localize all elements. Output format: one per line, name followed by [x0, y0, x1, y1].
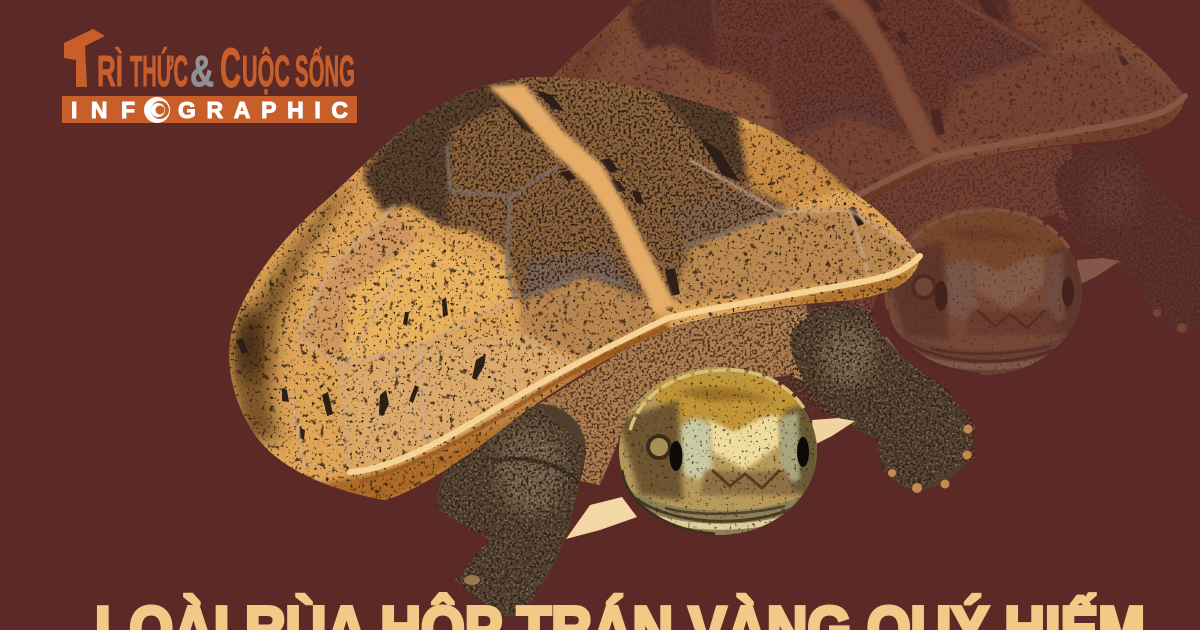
banner icon: concentric O: [144, 97, 170, 123]
right side dark: [785, 400, 820, 500]
dark speckle marks: [236, 208, 864, 440]
plastron right: [812, 418, 855, 445]
lower orange band: [300, 318, 668, 505]
logo wordmark: &: [190, 47, 214, 96]
lower jaw bands: [630, 490, 815, 540]
gold crown: [655, 373, 810, 436]
pale orange scute right: [740, 126, 844, 206]
lower face pattern: [700, 470, 795, 495]
black seam blotches: [500, 90, 740, 296]
logo wordmark: [97, 36, 355, 99]
banner text: [71, 97, 348, 123]
fine speckle texture: [225, 75, 925, 505]
infographic canvas: SỐNG: [295, 45, 355, 96]
logo wordmark: RÌ: [97, 46, 123, 96]
toes: [888, 424, 972, 493]
greyish seams: [447, 145, 785, 300]
body skin under shell: [490, 300, 860, 490]
scute seams: [290, 160, 920, 468]
left cheek: [618, 400, 683, 500]
central stripe: [488, 84, 676, 312]
infographic banner: [62, 96, 357, 123]
right eye zone: [780, 412, 800, 482]
logo: [62, 29, 357, 123]
head: [618, 367, 820, 540]
shell: [225, 50, 925, 505]
left eye zone: [680, 418, 712, 480]
eye ring: [648, 436, 670, 458]
head rim: [630, 370, 805, 430]
left edge shading: [225, 175, 360, 440]
ghost turtle watermark: [490, 0, 1200, 460]
shell rim highlight: [350, 256, 920, 472]
logo icon: roof T: [64, 29, 105, 87]
logo wordmark: THỨC: [130, 46, 188, 96]
logo wordmark: C: [220, 36, 241, 99]
dark carapace scutes: [340, 50, 820, 330]
logo wordmark: UỘC: [242, 45, 290, 96]
banner text: INF: [71, 97, 135, 123]
turtle photo illustration: [225, 50, 980, 620]
eyes: [670, 441, 682, 471]
banner text: GRAPHIC: [178, 97, 348, 123]
mid lower scutes: [678, 208, 918, 305]
upper right edge shading: [720, 105, 852, 190]
right front leg: [785, 295, 980, 495]
left front leg: [430, 400, 590, 620]
cream chevron: [708, 415, 780, 470]
plastron left: [566, 497, 637, 539]
